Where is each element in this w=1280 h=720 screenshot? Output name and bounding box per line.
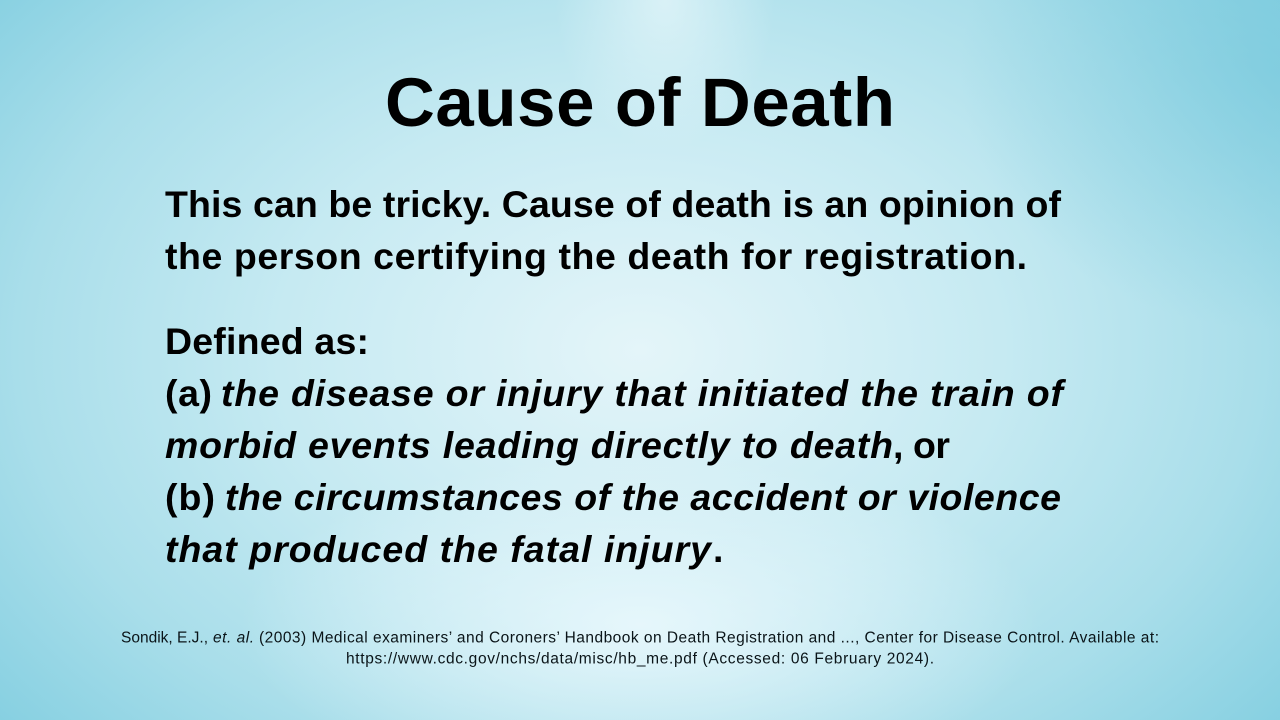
definition text block: Defined as:	[165, 320, 369, 362]
intro text block	[165, 183, 1062, 277]
definition text block: the disease or injury that initiated the train of	[221, 372, 1066, 414]
title: Cause of Death	[385, 64, 895, 141]
definition text block: (b)	[165, 476, 215, 518]
definition text block: the circumstances of the accident or violence	[225, 476, 1061, 518]
definition text block	[165, 320, 1066, 570]
citation: https://www.cdc.gov/nchs/data/misc/hb_me.pdf (Accessed: 06 February 2024).	[346, 650, 934, 668]
definition text block: .	[713, 528, 723, 570]
citation: Sondik, E.J.,	[121, 630, 208, 646]
definition text block: , or	[893, 424, 950, 466]
citation: et. al.	[213, 630, 254, 646]
intro text block: the person certifying the death for registration.	[165, 235, 1027, 277]
intro text block: This can be tricky. Cause of death is an opinion of	[165, 183, 1062, 225]
citation: (2003) Medical examiners’ and Coroners’ Handbook on Death Registration and ..., Center for Disease Control. Available at:	[259, 630, 1159, 646]
definition text block: (a)	[165, 372, 212, 414]
citation	[121, 630, 1159, 668]
definition text block: that produced the fatal injury	[165, 528, 713, 570]
definition text block: morbid events leading directly to death	[165, 424, 893, 466]
